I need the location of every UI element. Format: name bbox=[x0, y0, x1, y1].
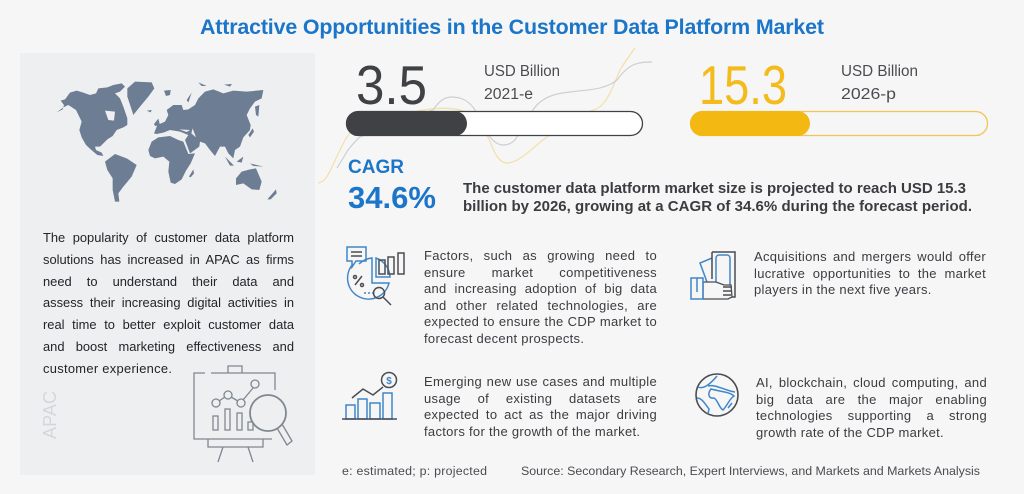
text block: APAC description: solutions has increased in APAC as firms bbox=[43, 252, 294, 267]
text block: factors bbox=[424, 248, 657, 346]
market size statement: billion by 2026, growing at a CAGR of 34.6% during the forecast period. bbox=[463, 198, 972, 215]
text block: use cases: expected to act as the major driving bbox=[424, 407, 657, 422]
stat: 3.5 USD Billion 2021-e: USD Billion bbox=[484, 63, 560, 80]
stat: 15.3 USD Billion 2026-p: 2026-p bbox=[841, 86, 896, 103]
text block: acquisitions: Acquisitions and mergers would offer bbox=[754, 249, 986, 264]
stat: 3.5 USD Billion 2021-e bbox=[346, 54, 642, 136]
APAC label: APAC bbox=[40, 391, 60, 439]
text block: factors: ensure market competitiveness bbox=[424, 265, 657, 280]
text block: technologies bbox=[756, 375, 987, 440]
market size statement: The customer data platform market size is projected to reach USD 15.3 bbox=[463, 180, 966, 197]
text block: use cases: Emerging new use cases and multiple bbox=[424, 374, 657, 389]
stat: 15.3 USD Billion 2026-p bbox=[690, 54, 988, 136]
text block: factors: expected to ensure the CDP market to bbox=[424, 314, 657, 329]
text block: acquisitions bbox=[754, 249, 986, 297]
text block: acquisitions: players in the next five years. bbox=[754, 282, 932, 297]
stat: 3.5 USD Billion 2021-e: 2021-e bbox=[484, 86, 533, 103]
text block: technologies: AI, blockchain, cloud computing, and bbox=[756, 375, 987, 390]
decorative trend lines bbox=[318, 48, 652, 183]
footnote: legend: e: estimated; p: projected bbox=[342, 464, 487, 478]
stat: 15.3 USD Billion 2026-p: USD Billion bbox=[841, 63, 918, 80]
text block: technologies: growth rate of the CDP market. bbox=[756, 425, 944, 440]
icon: globe bbox=[696, 374, 738, 416]
text block: use cases: factors for the growth of the market. bbox=[424, 424, 640, 439]
CAGR callout: 34.6% bbox=[348, 180, 436, 215]
icon: money in hand bbox=[691, 252, 735, 299]
market size statement bbox=[463, 180, 972, 215]
text block: APAC description: real time to better exploit customer data bbox=[43, 317, 294, 332]
text block: technologies: big data are the major enabling bbox=[756, 392, 987, 407]
text block: factors: forecast decent prospects. bbox=[424, 331, 584, 346]
world map bbox=[57, 82, 277, 202]
text block: factors: and increasing adoption of big data bbox=[424, 281, 657, 296]
footnote: source: Source: Secondary Research, Expert Interviews, and Markets and Markets Analysis bbox=[521, 464, 980, 478]
text block: APAC description: assess their increasing digital activities in bbox=[43, 295, 294, 310]
stat: 3.5 USD Billion 2021-e: 3.5 bbox=[356, 54, 427, 116]
text block: use cases: usage of existing datasets are bbox=[424, 391, 657, 406]
progress bar: 2021 bbox=[346, 111, 642, 136]
icon: growth chart with dollar: $ bbox=[386, 376, 392, 387]
text block: factors: and other related technologies, are bbox=[424, 298, 657, 313]
text block: factors: Factors, such as growing need to bbox=[424, 248, 657, 263]
CAGR callout: CAGR bbox=[348, 157, 404, 178]
text block: APAC description: The popularity of customer data platform bbox=[43, 230, 294, 245]
panel: APAC regional overview bbox=[20, 53, 315, 475]
icon: growth chart with dollar bbox=[342, 372, 397, 419]
text block: APAC description bbox=[43, 230, 294, 376]
text block: APAC description: need to understand their data and bbox=[43, 274, 294, 289]
text block: use cases bbox=[424, 374, 657, 439]
icon: analytics chart with percent bbox=[347, 247, 404, 305]
text block: APAC description: and boost marketing effectiveness and bbox=[43, 339, 294, 354]
text block: acquisitions: lucrative opportunities to the market bbox=[754, 266, 986, 281]
text block: APAC description: customer experience. bbox=[43, 361, 172, 376]
icon: presentation board with magnifier bbox=[194, 366, 292, 462]
text block: technologies: technologies supporting a strong bbox=[756, 408, 987, 423]
CAGR callout bbox=[348, 157, 436, 215]
stat: 15.3 USD Billion 2026-p: 15.3 bbox=[699, 54, 787, 116]
title: Attractive Opportunities in the Customer Data Platform Market bbox=[200, 15, 824, 39]
progress bar: 2026 bbox=[690, 111, 988, 136]
